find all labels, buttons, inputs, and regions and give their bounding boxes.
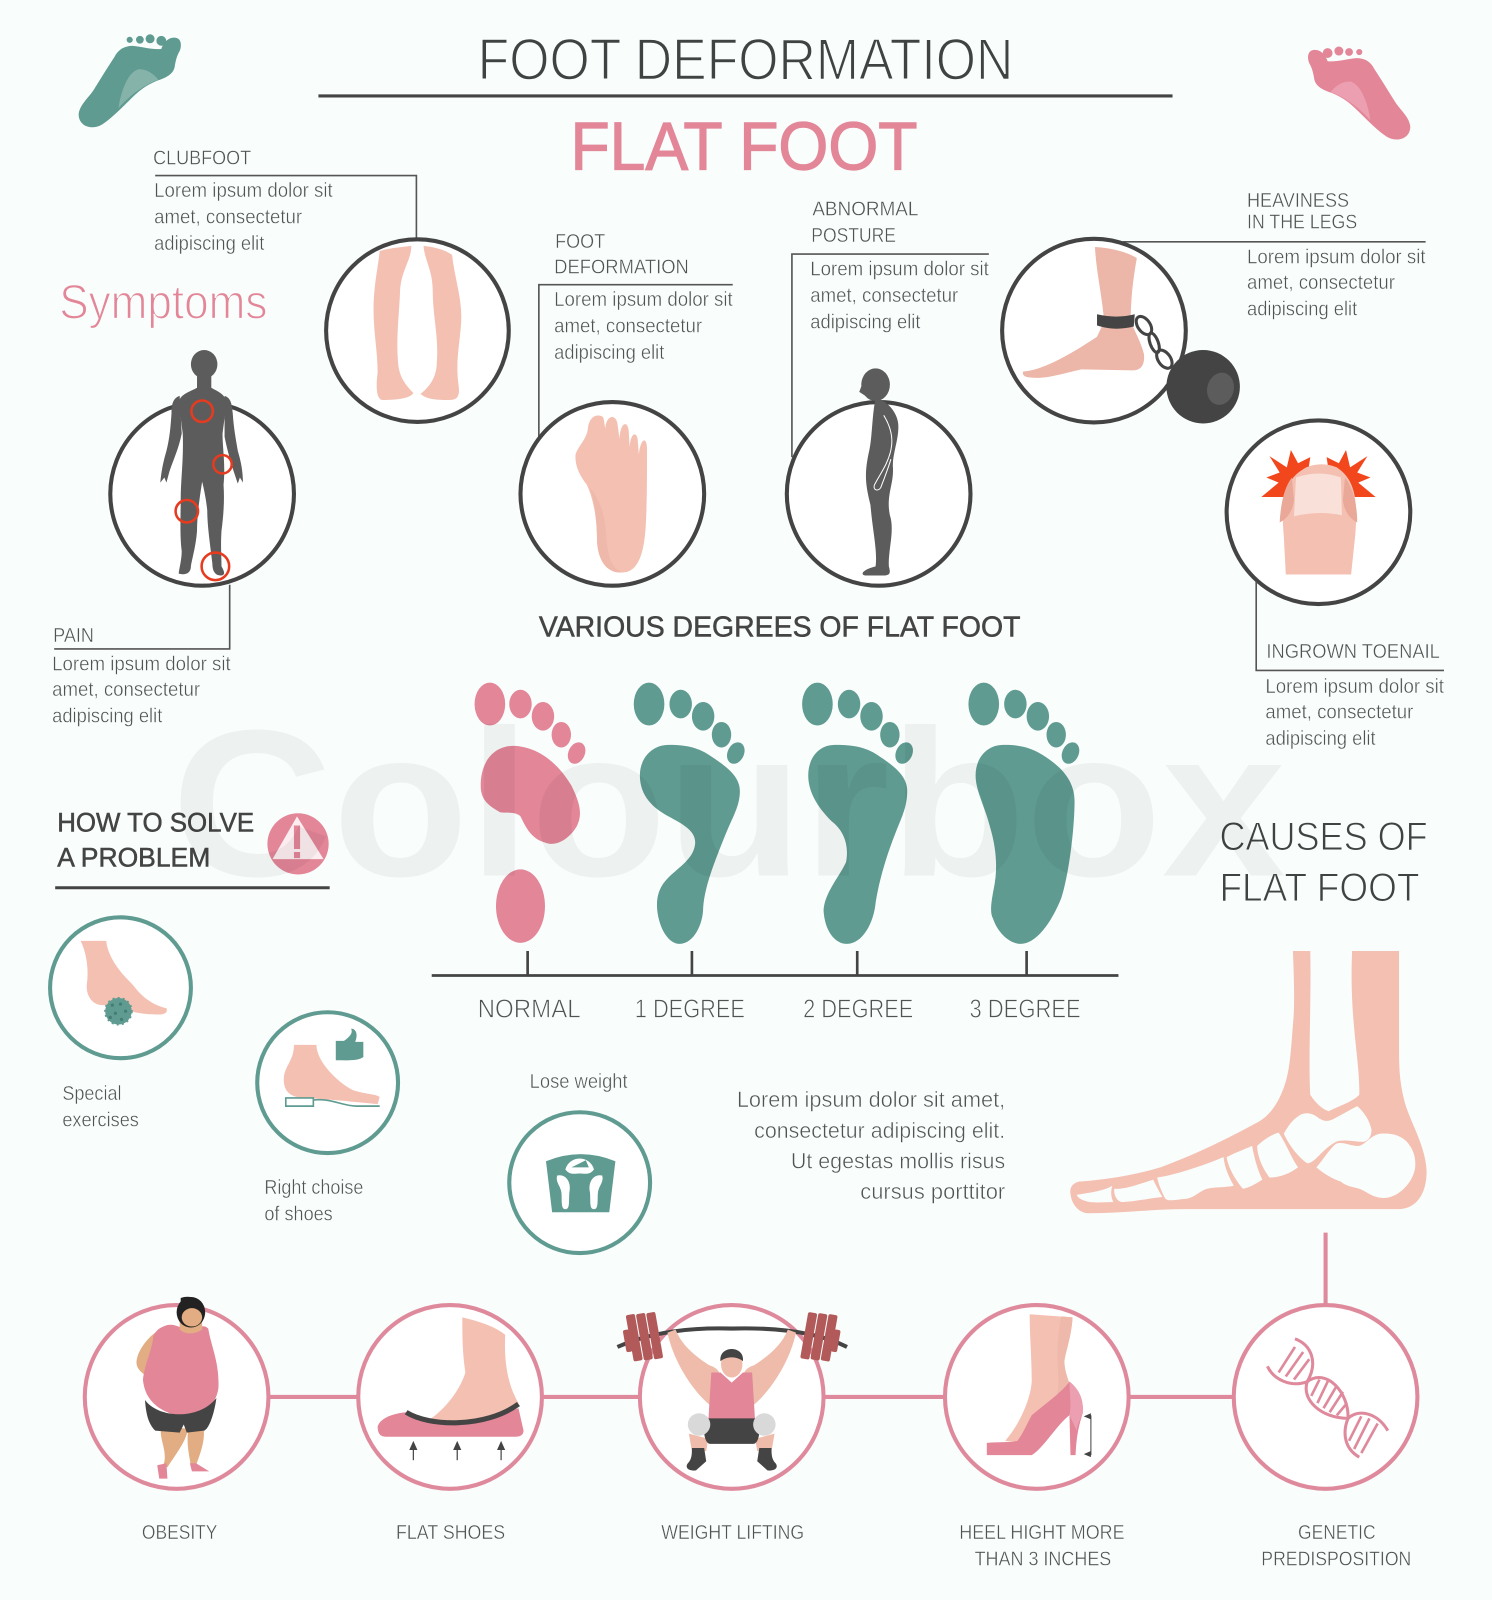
heading: causes of flat foot: FLAT FOOT — [1219, 866, 1419, 910]
panel: flat shoes — [358, 1305, 542, 1544]
panel: heel height — [945, 1305, 1129, 1570]
text: clubfoot description: Lorem ipsum dolor sit — [154, 180, 333, 202]
label: heel hight: THAN 3 INCHES — [975, 1548, 1111, 1570]
text: right-aligned paragraph: consectetur adipiscing elit. — [754, 1118, 1005, 1143]
text: special exercises: exercises — [62, 1110, 139, 1132]
text: foot deformation description: Lorem ipsum dolor sit — [554, 289, 733, 311]
icon: leg with ball and chain — [1002, 239, 1240, 423]
panel: lose weight — [509, 1071, 650, 1253]
label: genetic predisposition: GENETIC — [1298, 1522, 1376, 1544]
label: weight lifting: WEIGHT LIFTING — [661, 1522, 804, 1544]
text: special exercises: Special — [62, 1083, 122, 1105]
chart: footprints by degree — [432, 683, 1118, 1023]
text: ingrown toenail description: amet, consectetur — [1265, 701, 1414, 723]
text: clubfoot description: amet, consectetur — [154, 206, 302, 228]
title: FOOT DEFORMATION — [478, 28, 1013, 93]
heading: abnormal posture: POSTURE — [811, 225, 896, 247]
footprint: 2 degree — [802, 683, 916, 944]
text: foot deformation description — [554, 289, 733, 364]
label: genetic predisposition: PREDISPOSITION — [1261, 1548, 1411, 1570]
text: ingrown toenail description — [1265, 676, 1444, 750]
labels: degree axis — [478, 995, 1081, 1023]
icon: side silhouette — [787, 368, 970, 586]
text: right-aligned paragraph: cursus porttitor — [860, 1179, 1006, 1204]
heading: heaviness in the legs — [1247, 190, 1357, 234]
footprint: normal — [475, 683, 589, 943]
labels: degree axis: 3 DEGREE — [969, 995, 1081, 1023]
heading: heaviness in the legs: IN THE LEGS — [1247, 212, 1357, 234]
text: right-aligned paragraph: Ut egestas mollis risus — [791, 1148, 1005, 1173]
heading: causes of flat foot: CAUSES OF — [1219, 815, 1428, 859]
heading: various degrees: VARIOUS DEGREES OF FLAT FOOT — [539, 612, 1020, 644]
labels: degree axis: 1 DEGREE — [635, 995, 745, 1023]
heading: ingrown toenail: INGROWN TOENAIL — [1266, 641, 1440, 663]
heading: foot deformation — [554, 231, 689, 278]
text: ingrown toenail description: adipiscing elit — [1265, 728, 1376, 750]
heading: how to solve a problem: A PROBLEM — [57, 842, 210, 872]
text: pain description: amet, consectetur — [52, 679, 200, 701]
label: heel hight — [959, 1522, 1125, 1570]
icon: body with pain points — [110, 350, 294, 586]
illustration: foot skeleton — [1070, 951, 1427, 1213]
panel: heaviness in the legs — [1002, 190, 1426, 423]
text: lose weight: Lose weight — [530, 1071, 628, 1093]
footprint: 3 degree — [968, 683, 1083, 944]
icon: weightlifter — [617, 1305, 847, 1489]
text: abnormal posture description: Lorem ipsum dolor sit — [810, 259, 989, 281]
icon: flat shoe with arrows — [358, 1305, 542, 1489]
icon: scale — [509, 1112, 650, 1253]
panel: ingrown toenail — [1227, 420, 1444, 750]
panel: special exercises — [50, 917, 191, 1132]
icon: ingrown toenail — [1227, 420, 1410, 604]
labels: degree axis: NORMAL — [478, 995, 581, 1023]
icon: DNA helix — [1234, 1305, 1417, 1489]
text: pain description: Lorem ipsum dolor sit — [52, 653, 231, 675]
icon: warning — [267, 813, 329, 874]
text: abnormal posture description: adipiscing elit — [810, 312, 921, 334]
text: clubfoot description — [154, 180, 333, 255]
heading: clubfoot: CLUBFOOT — [153, 147, 251, 169]
text: right choise of shoes — [264, 1177, 363, 1225]
text: pain description: adipiscing elit — [52, 705, 163, 727]
icon: foot on insole with thumbs up — [257, 1012, 398, 1153]
panel: right shoes — [257, 1012, 398, 1225]
heading: foot deformation: DEFORMATION — [554, 256, 689, 278]
icon: clubfoot legs — [326, 239, 509, 422]
text: heaviness description: Lorem ipsum dolor sit — [1247, 246, 1426, 268]
text: right choise of shoes: Right choise — [264, 1177, 363, 1199]
label: flat shoes: FLAT SHOES — [396, 1522, 505, 1544]
heading: how to solve a problem: HOW TO SOLVE — [57, 808, 254, 838]
text: heaviness description — [1247, 246, 1426, 320]
heading: how to solve a problem — [55, 808, 330, 888]
heading: foot deformation: FOOT — [555, 231, 605, 253]
icon: teal footprint — [79, 34, 181, 127]
labels: degree axis: 2 DEGREE — [803, 995, 913, 1023]
text: special exercises — [62, 1083, 139, 1132]
panel: weight lifting — [617, 1305, 847, 1544]
text: abnormal posture description: amet, consectetur — [810, 285, 959, 307]
text: clubfoot description: adipiscing elit — [154, 233, 265, 255]
footprint: 1 degree — [634, 683, 748, 944]
watermark: Colourbox — [172, 688, 1286, 921]
text: foot deformation description: amet, consectetur — [554, 316, 702, 338]
text: right-aligned paragraph — [737, 1087, 1006, 1204]
icon: overweight woman — [85, 1297, 268, 1489]
heading: symptoms: Symptoms — [59, 276, 267, 329]
text: ingrown toenail description: Lorem ipsum dolor sit — [1265, 676, 1444, 698]
heading: flat foot: FLAT FOOT — [570, 109, 917, 184]
text: pain description — [52, 653, 231, 727]
icon: pink footprint — [1308, 47, 1410, 140]
text: heaviness description: amet, consectetur — [1247, 272, 1395, 294]
heading: causes of flat foot — [1219, 815, 1428, 910]
heading: abnormal posture: ABNORMAL — [812, 198, 918, 220]
text: right-aligned paragraph: Lorem ipsum dolor sit amet, — [737, 1087, 1005, 1112]
heading: pain: PAIN — [53, 625, 94, 647]
panel: clubfoot — [153, 147, 509, 422]
label: obesity: OBESITY — [142, 1522, 218, 1544]
heading: abnormal posture — [811, 198, 918, 247]
icon: high heel — [945, 1305, 1129, 1489]
heading: heaviness in the legs: HEAVINESS — [1247, 190, 1349, 212]
panel: genetic predisposition — [1234, 1305, 1417, 1570]
text: foot deformation description: adipiscing elit — [554, 342, 665, 364]
panel: foot deformation — [520, 231, 733, 586]
panel: abnormal posture — [787, 198, 989, 586]
icon: deformed foot — [520, 402, 704, 586]
connectors: causes chain — [268, 1233, 1326, 1397]
panel: obesity — [85, 1297, 268, 1544]
icon: foot on massage ball — [50, 917, 191, 1058]
text: heaviness description: adipiscing elit — [1247, 298, 1358, 320]
text: abnormal posture description — [810, 259, 989, 334]
label: heel hight: HEEL HIGHT MORE — [959, 1522, 1125, 1544]
text: right choise of shoes: of shoes — [264, 1203, 333, 1225]
label: genetic predisposition — [1261, 1522, 1411, 1570]
panel: pain — [52, 350, 294, 727]
